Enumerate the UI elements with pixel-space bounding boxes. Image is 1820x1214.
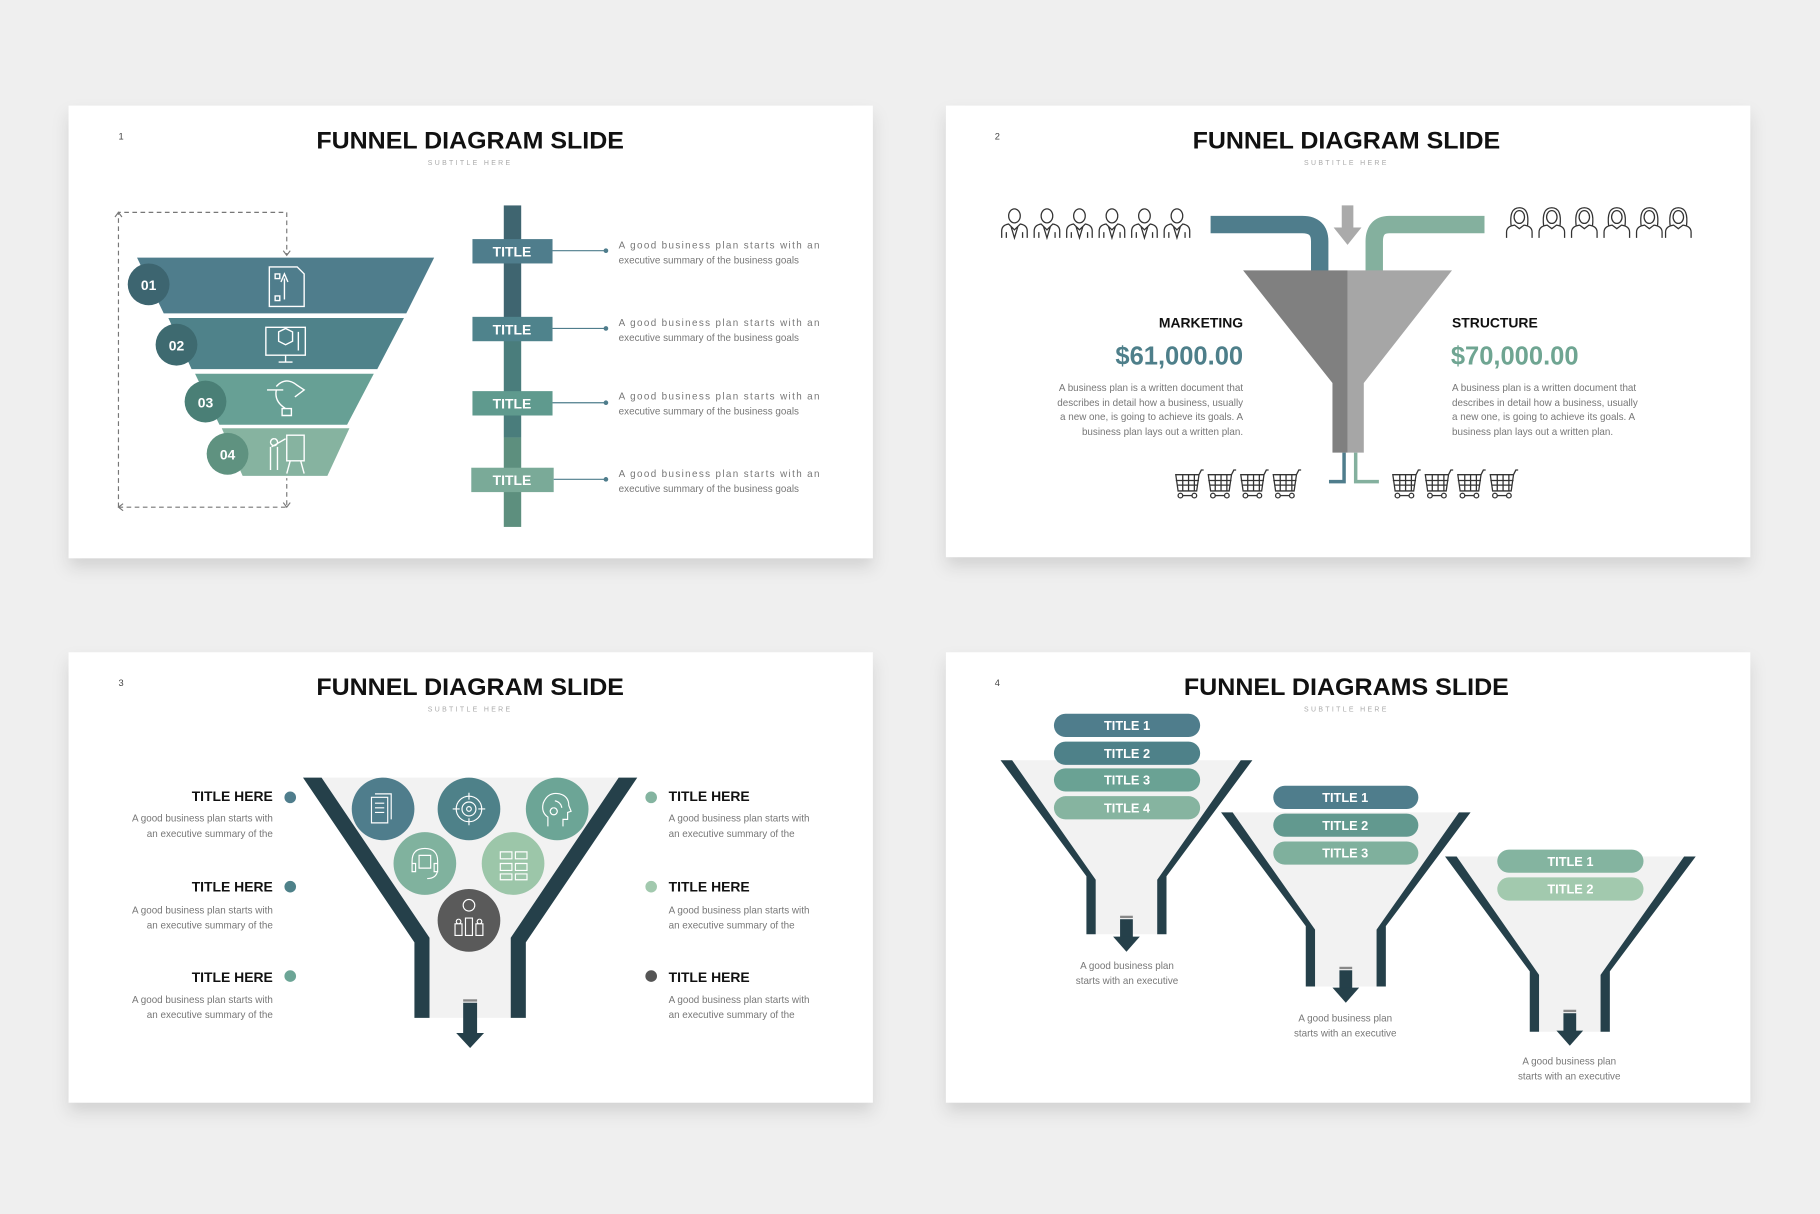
icons: carts left — [1176, 470, 1301, 498]
left items: TITLE HERE — [192, 969, 273, 985]
connectors — [553, 249, 608, 481]
subtitle slide 2: SUBTITLE HERE — [1304, 160, 1389, 167]
structure block: A business plan is a written document that — [1452, 383, 1636, 394]
gray funnel — [1243, 270, 1452, 453]
left items: an executive summary of the — [147, 920, 273, 931]
timeline title boxes: TITLE — [493, 243, 531, 259]
timeline title boxes: TITLE — [493, 396, 531, 412]
blue pipe — [1211, 225, 1320, 272]
right items: A good business plan starts with — [669, 995, 809, 1006]
subtitle slide 1: SUBTITLE HERE — [428, 160, 512, 167]
icons: men — [1002, 209, 1190, 238]
funnel 3 — [1445, 850, 1696, 1082]
timeline descriptions — [619, 240, 819, 495]
subtitle slide 3: SUBTITLE HERE — [428, 706, 512, 713]
funnel 1: TITLE 3 — [1104, 773, 1150, 788]
funnel 2: TITLE 3 — [1322, 846, 1368, 861]
green pipe — [1374, 225, 1485, 272]
left items: A good business plan starts with — [132, 995, 273, 1006]
timeline bar — [504, 205, 521, 527]
structure block: STRUCTURE — [1452, 314, 1538, 330]
panel: slide 2 — [946, 106, 1750, 557]
panel: slide 3 — [69, 652, 873, 1103]
funnel 1: TITLE 2 — [1104, 746, 1150, 761]
right items — [645, 788, 809, 1021]
slide number 2: 2 — [995, 131, 1000, 141]
funnel 1: starts with an executive — [1076, 976, 1179, 987]
left items: A good business plan starts with — [132, 905, 273, 916]
timeline descriptions: executive summary of the business goals — [619, 484, 799, 495]
left items: TITLE HERE — [192, 788, 273, 804]
right items: an executive summary of the — [669, 829, 795, 840]
timeline title boxes: TITLE — [493, 321, 531, 337]
marketing block: $61,000.00 — [1115, 342, 1243, 370]
marketing block: a new one, is going to achieve its goals. A — [1060, 412, 1244, 423]
icons: women — [1507, 208, 1691, 238]
icons: carts right — [1393, 470, 1518, 498]
panel: slide 1 — [69, 106, 873, 558]
number circles — [128, 263, 248, 475]
subtitle slide 4: SUBTITLE HERE — [1304, 706, 1389, 713]
right items: TITLE HERE — [669, 878, 750, 894]
dashed bracket — [115, 212, 290, 511]
timeline descriptions: executive summary of the business goals — [619, 255, 799, 266]
timeline descriptions: executive summary of the business goals — [619, 406, 799, 417]
marketing block: business plan lays out a written plan. — [1082, 427, 1243, 438]
funnel 3: starts with an executive — [1518, 1071, 1621, 1082]
funnel 3: A good business plan — [1522, 1056, 1616, 1067]
number circles: 01 — [141, 277, 157, 293]
left items: an executive summary of the — [147, 829, 273, 840]
number circles: 03 — [198, 394, 214, 410]
panel: slide 4 — [946, 652, 1750, 1103]
funnel shape — [303, 778, 637, 1018]
number circles: 04 — [220, 447, 236, 463]
funnel 3: TITLE 2 — [1547, 882, 1593, 897]
funnel 2: A good business plan — [1298, 1013, 1392, 1024]
right items: TITLE HERE — [669, 788, 750, 804]
funnel 1: TITLE 4 — [1104, 800, 1151, 815]
structure block: describes in detail how a business, usually — [1452, 398, 1638, 409]
funnel 1 — [1001, 714, 1252, 987]
timeline descriptions: executive summary of the business goals — [619, 333, 799, 344]
funnel 2: TITLE 1 — [1322, 790, 1368, 805]
icon circles — [352, 778, 589, 952]
outlet pipes — [1329, 453, 1344, 482]
left items: TITLE HERE — [192, 878, 273, 894]
right items: A good business plan starts with — [669, 905, 809, 916]
marketing block: MARKETING — [1159, 314, 1243, 330]
slide number 1: 1 — [118, 131, 124, 141]
funnel 2: TITLE 2 — [1322, 818, 1368, 833]
funnel layers — [137, 258, 434, 476]
marketing block — [1057, 314, 1244, 438]
left items: an executive summary of the — [147, 1010, 273, 1021]
title slide 2: FUNNEL DIAGRAM SLIDE — [1193, 128, 1500, 155]
structure block: business plan lays out a written plan. — [1452, 427, 1613, 438]
timeline descriptions: A good business plan starts with an — [619, 318, 819, 329]
funnel 1: A good business plan — [1080, 961, 1174, 972]
title slide 1: FUNNEL DIAGRAM SLIDE — [316, 128, 624, 155]
title slide 4: FUNNEL DIAGRAMS SLIDE — [1184, 674, 1509, 701]
structure block: a new one, is going to achieve its goals. A — [1452, 412, 1635, 423]
structure block: $70,000.00 — [1451, 342, 1579, 370]
structure block — [1451, 314, 1638, 438]
slide number 4: 4 — [995, 678, 1000, 688]
right items: an executive summary of the — [669, 1010, 795, 1021]
left items: A good business plan starts with — [132, 814, 273, 825]
left items — [132, 788, 296, 1021]
timeline descriptions: A good business plan starts with an — [619, 469, 819, 480]
timeline descriptions: A good business plan starts with an — [619, 391, 819, 402]
icons in funnel — [266, 267, 305, 474]
timeline title boxes — [471, 239, 554, 492]
funnel 3: TITLE 1 — [1547, 854, 1593, 869]
right items: TITLE HERE — [669, 969, 750, 985]
marketing block: A business plan is a written document that — [1059, 383, 1243, 394]
funnel 1: TITLE 1 — [1104, 718, 1150, 733]
funnel 2: starts with an executive — [1294, 1028, 1397, 1039]
timeline title boxes: TITLE — [493, 472, 531, 488]
down arrow — [456, 999, 484, 1048]
right items: an executive summary of the — [669, 920, 795, 931]
marketing block: describes in detail how a business, usually — [1057, 398, 1243, 409]
gray arrow — [1334, 205, 1361, 245]
title slide 3: FUNNEL DIAGRAM SLIDE — [316, 674, 624, 701]
timeline descriptions: A good business plan starts with an — [619, 240, 819, 251]
right items: A good business plan starts with — [669, 814, 809, 825]
funnel 2 — [1221, 786, 1471, 1039]
number circles: 02 — [169, 338, 184, 354]
slide number 3: 3 — [118, 678, 124, 688]
